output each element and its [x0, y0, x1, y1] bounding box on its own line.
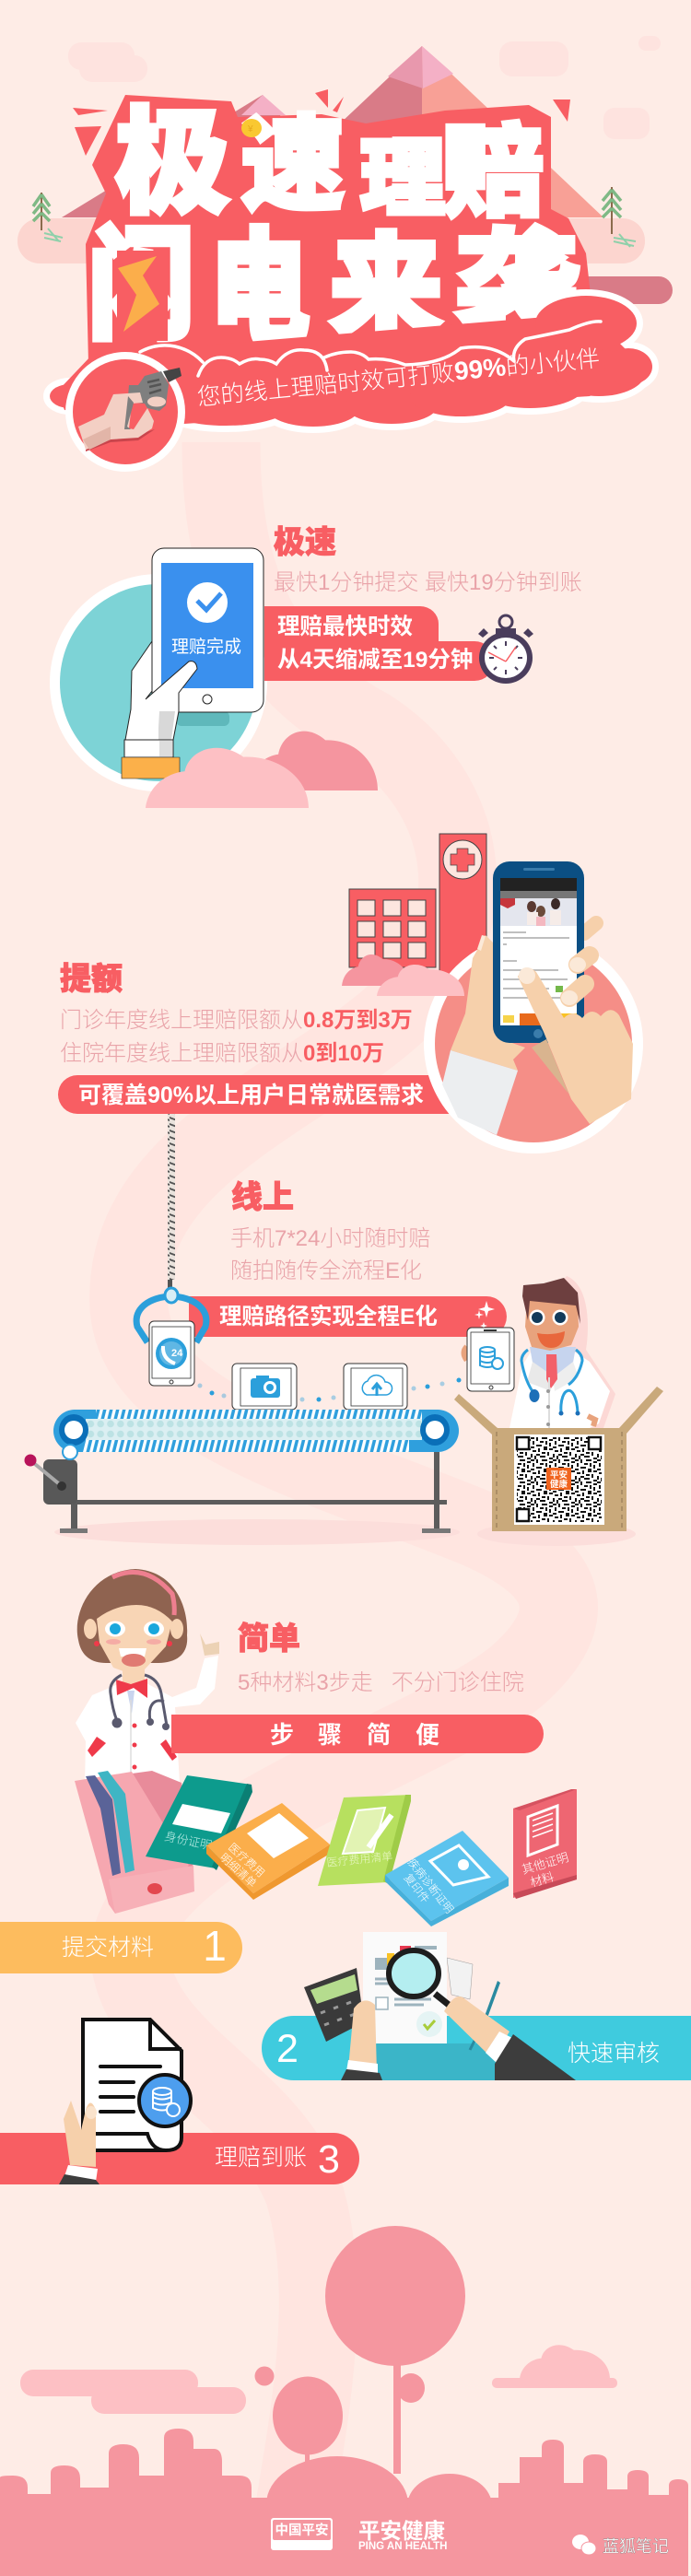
- body text: 最快1分钟提交 最快19分钟到账: [274, 570, 582, 595]
- logo: China Ping An: [271, 2518, 333, 2550]
- step 2 number: 2: [276, 2027, 299, 2071]
- icon: phone 24h: 24: [171, 1348, 183, 1359]
- clouds: [342, 954, 464, 996]
- illustration: green book: [318, 1795, 411, 1886]
- illustration: pink organizer: [75, 1771, 194, 1914]
- callout text: 步: [270, 1721, 294, 1749]
- illustration: blue book: 疾病诊断证明: [405, 1856, 456, 1916]
- callout pill: [171, 1715, 544, 1753]
- chain: [168, 1114, 175, 1280]
- panel: step 1: [0, 1922, 242, 1973]
- illustration: female doctor: [76, 1569, 219, 1783]
- step 3 label: 理赔到账: [215, 2145, 307, 2171]
- red cloud band: [50, 296, 652, 427]
- callout text: 可覆盖90%以上用户日常就医需求: [78, 1083, 424, 1108]
- panel: raised limit section: [58, 834, 643, 1280]
- step 1 number: 1: [203, 1922, 227, 1970]
- illustration: document in hand: [59, 2020, 191, 2184]
- panel: step 3: [0, 2020, 359, 2184]
- title text: 电: [210, 218, 310, 363]
- illustration: holding hand: [442, 923, 596, 1135]
- logo: Ping An Health: 平安健康: [358, 2519, 445, 2543]
- illustration: teal circle: [50, 574, 267, 791]
- faint clouds: [68, 36, 661, 139]
- icon: gold coin: ¥: [247, 124, 253, 135]
- watermark: [572, 2535, 669, 2556]
- heading: online: 线上: [231, 1180, 294, 1215]
- body text: [230, 1226, 430, 1283]
- trees: [254, 2226, 465, 2474]
- illustration: phone: 理赔完成: [171, 637, 241, 657]
- subtitle: 您的线上理赔时效可打败99%的小伙伴: [196, 343, 601, 411]
- city skyline: [0, 2429, 688, 2576]
- title text: 袭: [454, 219, 580, 359]
- paper shadow: [341, 2043, 553, 2080]
- pine tree left: [33, 193, 63, 241]
- pine tree right: [603, 187, 636, 247]
- step 2 pill: [262, 2016, 691, 2080]
- body text: 5种材料3步走 不分门诊住院: [238, 1670, 524, 1695]
- title text: 速: [241, 108, 345, 223]
- body text: 门诊年度线上理赔限额从0.8万到3万: [60, 1008, 413, 1033]
- decorative triangles: [73, 89, 570, 156]
- illustration: orange book: [206, 1803, 330, 1900]
- QR code: 健康: [550, 1479, 568, 1490]
- sparkles: [474, 1301, 495, 1329]
- illustration: male doctor: [464, 1276, 615, 1428]
- icon: stopwatch: [478, 615, 533, 684]
- illustration: circle backdrop: [424, 934, 643, 1153]
- callout text: [277, 614, 473, 673]
- heading: raised limit: 提额: [60, 962, 123, 997]
- icon: tablet upload: [344, 1364, 407, 1410]
- illustration: blue book: [385, 1831, 509, 1926]
- icon: hand with revolver: [65, 352, 185, 472]
- title text: [88, 100, 580, 363]
- callout pill: [58, 1075, 461, 1114]
- panel: simple section: [0, 1569, 577, 1926]
- panel: step 2: [262, 1932, 691, 2080]
- illustration: red book: 材料: [529, 1869, 556, 1890]
- illustration: cardboard box: [454, 1387, 663, 1546]
- panel: title header: [18, 36, 673, 472]
- callout text: 理赔最快时效: [277, 614, 413, 639]
- illustration: hand: [122, 641, 197, 779]
- illustration: document and calculator review: [304, 1932, 576, 2080]
- illustration: red book: 其他证明: [521, 1850, 570, 1877]
- step 1 pill: [0, 1922, 242, 1973]
- icon: phone database: [467, 1328, 514, 1391]
- callout pill: [189, 1296, 507, 1337]
- icon: tablet camera: [232, 1364, 297, 1410]
- illustration: blue book: 复印件: [402, 1871, 432, 1905]
- logo: China Ping An: 中国平安: [275, 2523, 328, 2538]
- illustration: phone with app: [493, 861, 584, 1043]
- title text: 闪: [88, 217, 195, 355]
- illustration: teal ID book: [0, 1775, 252, 1870]
- title text: 来: [329, 226, 443, 353]
- body text: 随拍随传全流程E化: [230, 1259, 422, 1283]
- illustration: hospital: [349, 834, 486, 976]
- step 3 number: 3: [318, 2137, 340, 2182]
- heading: simple: 简单: [238, 1622, 300, 1657]
- dark rose bar: [553, 276, 673, 304]
- callout text: 从4天缩减至19分钟: [277, 647, 473, 673]
- illustration: conveyor belt: [24, 1410, 460, 1545]
- QR code: 平安: [550, 1469, 568, 1481]
- panel: footer scene: [0, 2226, 688, 2576]
- body text: 住院年度线上理赔限额从0到10万: [60, 1041, 384, 1066]
- illustration: orange book: 明细清单: [217, 1851, 259, 1890]
- watermark: 蓝狐笔记: [603, 2537, 669, 2556]
- step 3 pill: [0, 2133, 359, 2184]
- illustration: red book: [513, 1789, 577, 1899]
- panel: online section: [24, 1180, 663, 1546]
- callout text: 便: [416, 1721, 439, 1749]
- clouds: [20, 2345, 617, 2414]
- step 1 label: 提交材料: [62, 1935, 154, 1961]
- mountains: [62, 46, 603, 217]
- dotted path: [197, 1378, 461, 1402]
- title text: 极: [115, 100, 230, 228]
- heading: speed: 极速: [274, 525, 336, 560]
- icon: phone 24h: [149, 1321, 194, 1386]
- callout pill: [264, 606, 494, 681]
- illustration: green book: 医疗费用清单: [326, 1850, 393, 1869]
- background ribbon: [129, 442, 558, 2506]
- illustration: phone: [152, 548, 264, 712]
- step 2 label: 快速审核: [568, 2041, 660, 2067]
- callout text: 理赔路径实现全程E化: [219, 1304, 438, 1329]
- ground hill: [18, 218, 645, 263]
- clouds: [146, 732, 378, 808]
- callout text: 简: [367, 1721, 391, 1749]
- callout text: 骤: [318, 1721, 342, 1749]
- body text: [60, 1008, 413, 1066]
- callout text: [270, 1721, 439, 1749]
- body text: 手机7*24小时随时赔: [230, 1226, 430, 1251]
- title text: 理: [360, 133, 445, 227]
- title text: 赔: [443, 116, 545, 229]
- QR code: [514, 1434, 604, 1525]
- panel: speed section: [50, 525, 582, 808]
- red title backdrop: [86, 95, 591, 364]
- illustration: orange book: 医疗费用: [226, 1841, 267, 1879]
- icon: lightning bolt: [118, 256, 159, 332]
- icon: blue gripper: [136, 1280, 206, 1342]
- illustration: teal ID book: 身份证明: [163, 1829, 213, 1853]
- bolt backing: [117, 251, 168, 341]
- icon: gold coin: [241, 119, 262, 137]
- illustration: pointing hand: [518, 955, 633, 1124]
- logo: Ping An Health: PING AN HEALTH: [358, 2541, 447, 2552]
